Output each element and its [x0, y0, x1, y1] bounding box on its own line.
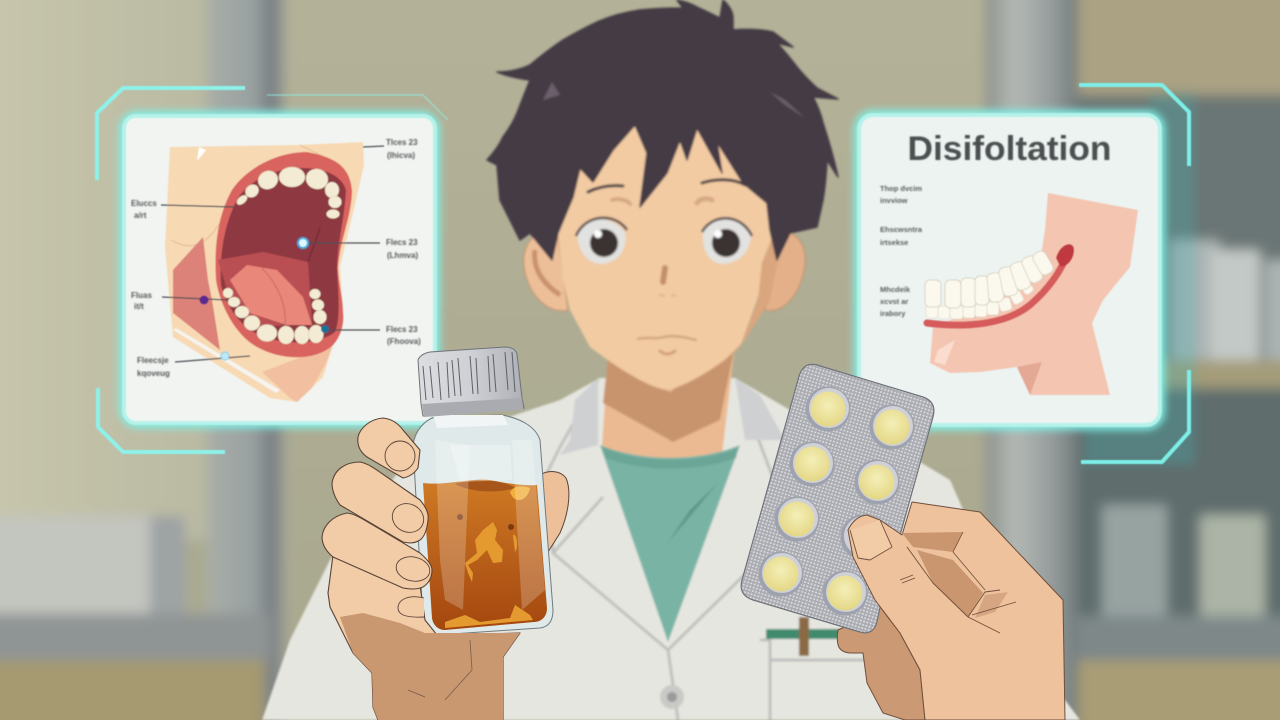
markers and leader lines: [161, 146, 384, 362]
hand and thumb over blister: [848, 502, 1065, 720]
foil blister: [741, 364, 934, 633]
shadow between thumb and index: [902, 532, 963, 552]
mouth interior: [221, 168, 346, 342]
teal haze behind frame: [1085, 95, 1195, 465]
lips: [216, 152, 352, 357]
small diagram labels: Fleecsje: [137, 356, 169, 365]
illustration: jaw and teeth profile: [925, 193, 1138, 395]
knuckle creases: [900, 575, 915, 583]
panel: mouth anatomy diagram: [97, 88, 448, 452]
amber liquid: [423, 480, 547, 630]
thumb nail: [850, 520, 892, 560]
glass reflections: [435, 440, 470, 610]
curled fingers behind blister: [837, 600, 925, 720]
hand holding bottle: [322, 418, 520, 720]
illustration: open mouth cross-section: [161, 142, 384, 402]
middle finger: [332, 462, 428, 543]
face: [552, 90, 775, 390]
white lab coat: [262, 378, 1080, 720]
upper teeth: [925, 249, 1055, 308]
bottle glass: [413, 415, 553, 635]
brows, nose and mouth: [588, 180, 745, 354]
small diagram labels: Eluccs: [131, 199, 157, 208]
hud corner brackets: [1079, 85, 1189, 462]
lower teeth: [926, 280, 1035, 319]
neck: [602, 345, 735, 470]
pinky knuckle: [398, 597, 424, 617]
thumb behind bottle: [540, 472, 569, 552]
bottle in left hand: [322, 347, 569, 720]
left side labels: Ehscwsntra: [880, 225, 923, 234]
panel: jaw disifoltation diagram: [859, 85, 1195, 465]
upper teeth: [235, 166, 342, 218]
small diagram labels: [131, 138, 421, 378]
left side labels: irabory: [880, 309, 906, 318]
panel frame and card: [124, 116, 435, 423]
small diagram labels: (Ihicva): [387, 151, 415, 160]
hud corner brackets: [97, 88, 448, 452]
screw cap: [418, 347, 524, 416]
ring finger: [322, 513, 432, 589]
amber medicine bottle: [413, 347, 553, 635]
small diagram labels: Flecs 23: [386, 238, 418, 247]
lower teeth: [223, 288, 326, 344]
golden swirl: [465, 522, 503, 582]
eyes: [576, 218, 752, 264]
palm: [328, 555, 520, 720]
tablets: [758, 386, 914, 616]
small diagram labels: (Fhoova): [387, 337, 421, 346]
index finger: [358, 418, 420, 478]
hair: [487, 0, 838, 260]
left side labels: xcvst ar: [880, 297, 908, 306]
small diagram labels: Tlces 23: [386, 138, 418, 147]
blister pack in right hand: [741, 364, 1065, 720]
coat collar and lapels: [547, 380, 906, 720]
person in white coat: [262, 0, 1080, 720]
coat pocket and pen: [766, 617, 846, 656]
small diagram labels: (Lhmva): [387, 251, 418, 260]
left side labels: irtsekse: [880, 238, 908, 247]
small diagram labels: Flecs 23: [386, 325, 418, 334]
ears: [524, 233, 568, 311]
small diagram labels: it/t: [134, 302, 144, 311]
finger nails: [385, 441, 415, 471]
small diagram labels: Fluas: [131, 291, 152, 300]
panel heading: Disifoltation: [908, 130, 1112, 168]
left side labels: Thop dvcim: [880, 184, 922, 193]
panel frame and card: [859, 115, 1160, 425]
left side labels: Mhcdeik: [880, 285, 911, 294]
left side labels: invviow: [880, 196, 908, 205]
small diagram labels: a/rt: [134, 211, 147, 220]
left side labels: [880, 184, 923, 318]
small diagram labels: kqoveug: [137, 369, 170, 378]
coat button: [660, 685, 684, 709]
green undershirt: [600, 445, 740, 642]
